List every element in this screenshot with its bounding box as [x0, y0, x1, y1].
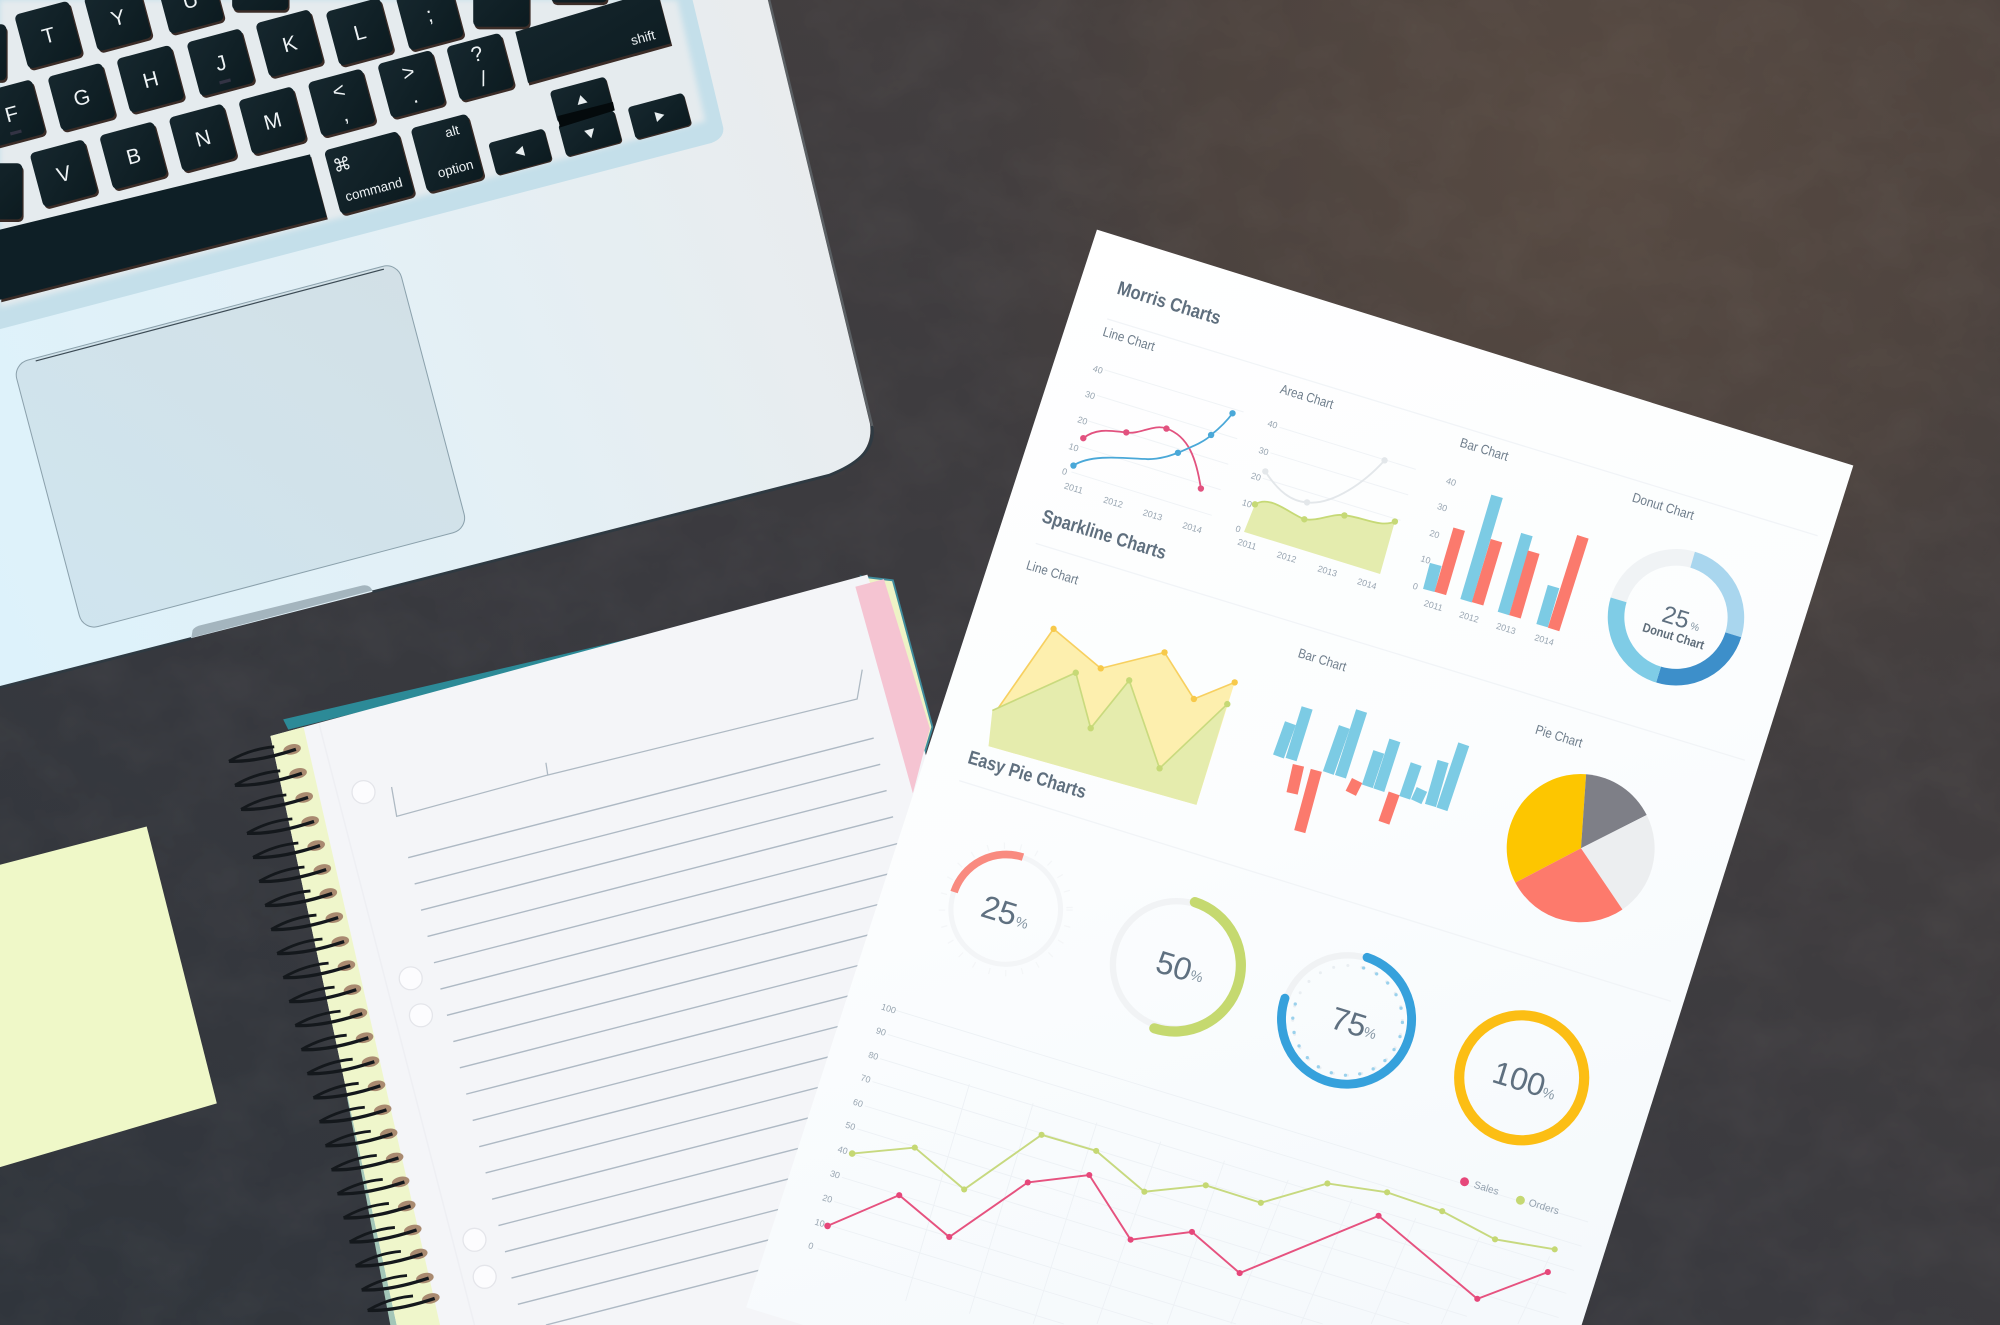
- slice: light: [1581, 815, 1655, 909]
- label: bar chart: Bar Chart: [1458, 435, 1510, 464]
- axis labels: 0: [807, 1240, 815, 1251]
- bottom letter row: [0, 32, 517, 222]
- axis labels: 0: [1061, 466, 1069, 477]
- axis labels: 30: [1084, 389, 1096, 401]
- axis labels: 40: [1445, 476, 1457, 488]
- percent sign: %: [1362, 1023, 1378, 1042]
- shift key: [515, 0, 672, 85]
- heading: Morris Charts: Morris Charts: [1115, 278, 1223, 329]
- notebook: [229, 575, 1020, 1325]
- blue bars: [1278, 708, 1464, 809]
- label: line chart: Line Chart: [1025, 557, 1080, 587]
- grid: [818, 1010, 1588, 1324]
- teal cover sliver: [283, 634, 676, 730]
- axis labels: 2011: [1063, 481, 1084, 496]
- green area: [1244, 501, 1398, 574]
- axis labels: 2012: [1458, 609, 1480, 625]
- axis labels: 2014: [1181, 520, 1203, 535]
- trackpad: [13, 262, 468, 630]
- gutter line: [319, 723, 474, 1325]
- blue bars: [1429, 496, 1554, 626]
- percent sign: %: [1188, 967, 1205, 986]
- page: [270, 575, 1020, 1325]
- axis labels: 2013: [1495, 621, 1517, 636]
- top row: [0, 0, 290, 83]
- home row: [0, 0, 608, 150]
- pink tab: [855, 579, 930, 793]
- panel: donut chart: [1616, 490, 1736, 677]
- home row: J: [213, 51, 229, 76]
- option key: [410, 113, 486, 195]
- legend: [1460, 1177, 1560, 1217]
- laptop front edge: [0, 426, 872, 687]
- axis labels: 10: [1241, 497, 1253, 510]
- axis labels: 80: [867, 1050, 880, 1062]
- bottom letter row: >: [400, 60, 417, 86]
- axis labels: 70: [859, 1073, 872, 1085]
- sheet paper: [746, 230, 1853, 1325]
- axis labels: 10: [1067, 441, 1080, 454]
- home row: L: [351, 20, 369, 46]
- space bar: [0, 154, 328, 302]
- bottom letter row: ?: [468, 42, 486, 67]
- label: line chart: Line Chart: [1101, 324, 1157, 354]
- panel: morris line chart: [1061, 324, 1244, 535]
- bottom letter row: <: [330, 79, 348, 104]
- top row: Y: [109, 6, 128, 31]
- home row: G: [71, 85, 93, 111]
- axis labels: 2014: [1533, 632, 1555, 648]
- grid: [1071, 370, 1244, 515]
- axis labels: [807, 1002, 897, 1251]
- home row: ;: [424, 3, 435, 27]
- axis labels: 20: [1250, 470, 1262, 483]
- axis labels: 40: [1266, 418, 1279, 431]
- slice: red: [1515, 848, 1622, 922]
- pink line: [1080, 425, 1204, 492]
- bottom letter row: ,: [339, 103, 351, 127]
- slice: yellow: [1507, 774, 1586, 883]
- axis labels: 90: [875, 1025, 887, 1038]
- page stack edge: [861, 577, 932, 765]
- laptop shadow edge: [769, 0, 872, 427]
- donut rings: [1616, 557, 1736, 677]
- axis labels: 2013: [1142, 507, 1164, 523]
- axis labels: 30: [1436, 501, 1448, 514]
- label: pie chart: Pie Chart: [1534, 722, 1585, 751]
- bottom letter row: V: [54, 162, 74, 188]
- red bars: [1440, 529, 1583, 629]
- label: area chart: Area Chart: [1278, 381, 1336, 412]
- axis labels: [1412, 476, 1555, 648]
- top row: T: [40, 23, 58, 49]
- axis labels: 2011: [1423, 598, 1444, 613]
- bottom letter row: N: [193, 126, 213, 152]
- axis labels: 10: [1419, 553, 1432, 566]
- axis labels: 20: [821, 1192, 834, 1205]
- axis labels: [1061, 363, 1203, 535]
- sales line: [824, 1172, 1551, 1302]
- donut value: 25: [1659, 601, 1692, 635]
- laptop opening notch: [191, 585, 372, 638]
- axis labels: 50: [844, 1120, 857, 1132]
- home row: H: [140, 67, 161, 93]
- axis labels: 20: [1076, 414, 1089, 427]
- back cover sliver: [347, 1097, 408, 1325]
- slice: gray: [1581, 774, 1647, 848]
- blue line: [1070, 410, 1236, 469]
- panel: morris bar chart: [1412, 435, 1583, 648]
- value: 50: [1152, 943, 1196, 988]
- punched holes: [352, 781, 496, 1288]
- red bars: [1292, 765, 1394, 832]
- panel: bottom line chart: [807, 1002, 1588, 1324]
- label: donut chart: Donut Chart: [1631, 490, 1696, 523]
- green area: [989, 670, 1230, 805]
- panel: pie chart: [1507, 722, 1655, 922]
- home row: K: [280, 32, 300, 57]
- spiral binding: [229, 743, 441, 1310]
- yellow area: [989, 626, 1238, 805]
- gauge: 100 percent: [1459, 1015, 1584, 1140]
- panel: sparkline line chart: [989, 557, 1238, 805]
- gray line: [1262, 457, 1388, 506]
- option key: alt: [443, 122, 461, 140]
- axis labels: 40: [1092, 363, 1104, 376]
- axis labels: 2013: [1316, 563, 1338, 579]
- heading: Easy Pie Charts: Easy Pie Charts: [965, 747, 1089, 803]
- value: 75: [1327, 1000, 1371, 1044]
- laptop: [0, 0, 872, 687]
- axis labels: 2012: [1102, 495, 1124, 510]
- axis labels: 30: [829, 1168, 841, 1181]
- percent sign: %: [1540, 1084, 1557, 1103]
- bottom letter row: .: [409, 85, 421, 108]
- axis labels: 100: [880, 1002, 897, 1016]
- shift key: shift: [629, 27, 657, 48]
- grid: [1263, 427, 1416, 520]
- orders line: [849, 1132, 1558, 1252]
- legend: Sales: [1472, 1180, 1500, 1198]
- heading: Sparkline Charts: Sparkline Charts: [1039, 506, 1169, 564]
- keyboard well: [0, 0, 723, 329]
- axis labels: 30: [1257, 445, 1270, 457]
- legend: Orders: [1527, 1198, 1560, 1217]
- axis labels: 60: [852, 1097, 864, 1109]
- command key: [324, 131, 417, 217]
- heading box outline: [392, 670, 862, 816]
- bottom letter row: B: [124, 144, 143, 170]
- axis labels: 2011: [1236, 537, 1258, 552]
- panel: sparkline bar chart: [1278, 645, 1464, 832]
- section dividers: [959, 319, 1818, 1001]
- axis labels: 0: [1234, 524, 1242, 535]
- gauge: 75 percent: [1281, 955, 1413, 1085]
- label: bar chart: Bar Chart: [1296, 645, 1348, 674]
- value: 25: [977, 888, 1022, 933]
- axis labels: 0: [1412, 581, 1419, 592]
- command key: ⌘: [331, 153, 353, 177]
- bottom letter row: /: [478, 67, 490, 91]
- value: 100: [1488, 1054, 1550, 1104]
- home row: F: [3, 102, 21, 127]
- spiral strip: [270, 727, 440, 1325]
- command key: command: [344, 175, 404, 204]
- bottom letter row: M: [261, 108, 284, 135]
- sticky note: [0, 827, 217, 1167]
- gauge: 50 percent: [1113, 901, 1241, 1031]
- gauge: 25 percent: [942, 846, 1070, 973]
- axis labels: 40: [837, 1144, 849, 1156]
- axis labels: 2014: [1356, 576, 1378, 592]
- axis labels: 10: [814, 1217, 826, 1229]
- keyboard keys: [0, 0, 692, 302]
- axis labels: [1234, 418, 1378, 592]
- donut caption: Donut Chart: [1641, 620, 1707, 653]
- ruled lines: [408, 738, 990, 1325]
- panel: morris area chart: [1234, 381, 1416, 592]
- axis labels: 2012: [1276, 549, 1298, 565]
- option key: option: [436, 157, 475, 181]
- laptop body: [0, 0, 870, 687]
- axis labels: 20: [1428, 528, 1441, 540]
- donut percent: %: [1689, 621, 1701, 634]
- chart sheet: [746, 230, 1853, 1325]
- arrow keys: [488, 76, 692, 176]
- percent sign: %: [1014, 913, 1030, 932]
